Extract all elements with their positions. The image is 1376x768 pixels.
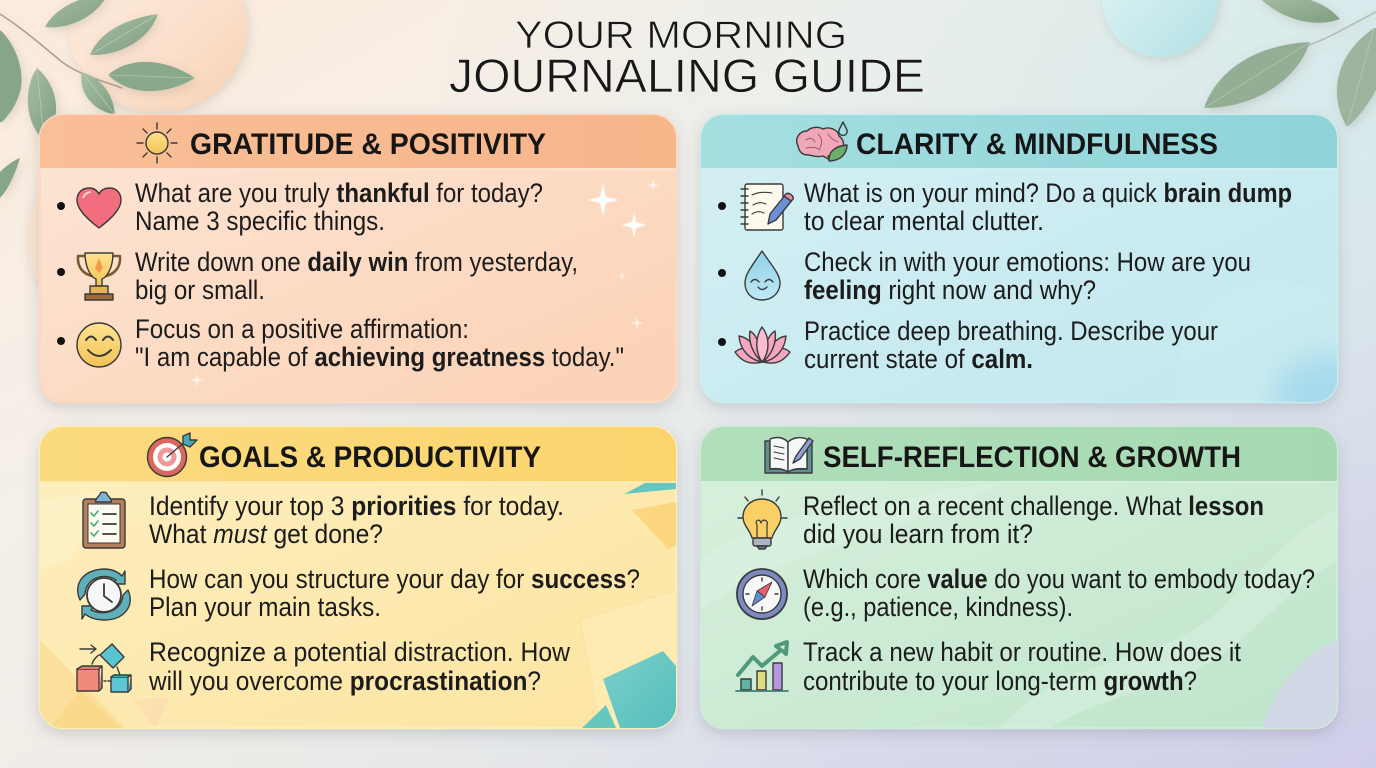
panel header band: gratitude [40, 115, 676, 170]
item: daily win: big or small. [135, 275, 265, 305]
item: thankful [57, 178, 543, 236]
item: structure your day: How can you structure your day for success? [149, 564, 640, 594]
sparkles [189, 178, 660, 388]
item: thankful: What are you truly thankful for today? [135, 178, 543, 208]
item: brain dump [718, 178, 1292, 236]
item: growth: Track a new habit or routine. How does it [803, 637, 1242, 667]
item: procrastination: will you overcome procrastination? [148, 666, 541, 696]
item: structure your day [78, 564, 640, 622]
heading: gratitude: GRATITUDE & POSITIVITY [190, 128, 546, 161]
item: daily win: Write down one daily win from yesterday, [135, 247, 578, 277]
item: lesson: Reflect on a recent challenge. What lesson [803, 491, 1264, 521]
panel: clarity and mindfulness [695, 114, 1343, 413]
decorative teal circle, top right [1102, 0, 1218, 57]
item: daily win [57, 247, 578, 305]
item: structure your day: Plan your main tasks. [149, 592, 381, 622]
item: feeling: feeling right now and why? [804, 275, 1096, 305]
leaves, top left [0, 0, 195, 198]
panel: self-reflection and growth [701, 427, 1337, 728]
item: growth: contribute to your long-term growth? [803, 666, 1197, 696]
item: affirmation: "I am capable of achieving greatness today." [135, 342, 624, 372]
item: priorities: Identify your top 3 priorities for today. [149, 491, 564, 521]
item: feeling: Check in with your emotions: How are you [804, 247, 1251, 277]
item: feeling [718, 247, 1251, 305]
icon: target with arrow [148, 433, 197, 476]
title [449, 14, 925, 102]
title: JOURNALING GUIDE [449, 49, 925, 102]
panel header band: clarity [701, 115, 1337, 402]
icon: open book with pen [765, 438, 813, 473]
item: brain dump: What is on your mind? Do a quick brain dump [804, 178, 1292, 208]
item: core value: (e.g., patience, kindness). [803, 592, 1073, 622]
item: lesson: did you learn from it? [803, 519, 1033, 549]
item: core value: Which core value do you want to embody today? [803, 564, 1315, 594]
heading: self-reflection: SELF-REFLECTION & GROWTH [823, 441, 1241, 474]
item: growth [736, 637, 1242, 696]
item: calm [718, 316, 1218, 374]
item: priorities: What must get done? [149, 519, 383, 549]
item: lesson [738, 490, 1264, 549]
panel: gratitude and positivity [40, 115, 676, 402]
decorative peach circles, top left [28, 0, 247, 306]
item: procrastination [77, 637, 571, 696]
item: core value [737, 564, 1315, 622]
panel: goals and productivity [40, 427, 676, 728]
panel header band and wave pattern: self-reflection [701, 427, 1337, 728]
item: procrastination: Recognize a potential distraction. How [149, 637, 571, 667]
title: YOUR MORNING [515, 14, 847, 57]
heading: clarity: CLARITY & MINDFULNESS [856, 128, 1218, 161]
icon: brain with leaf [797, 122, 847, 161]
item: brain dump: to clear mental clutter. [804, 206, 1044, 236]
item: calm: current state of calm. [804, 344, 1033, 374]
item: affirmation [57, 314, 624, 372]
item: affirmation: Focus on a positive affirmation: [135, 314, 469, 344]
item: thankful: Name 3 specific things. [135, 206, 385, 236]
icon: sun [137, 123, 177, 163]
leaves, top right [1204, 0, 1376, 127]
item: calm: Practice deep breathing. Describe your [804, 316, 1218, 346]
heading: goals: GOALS & PRODUCTIVITY [199, 441, 541, 474]
item: priorities [83, 491, 564, 549]
panel header band and geometric shapes: goals [40, 427, 676, 728]
